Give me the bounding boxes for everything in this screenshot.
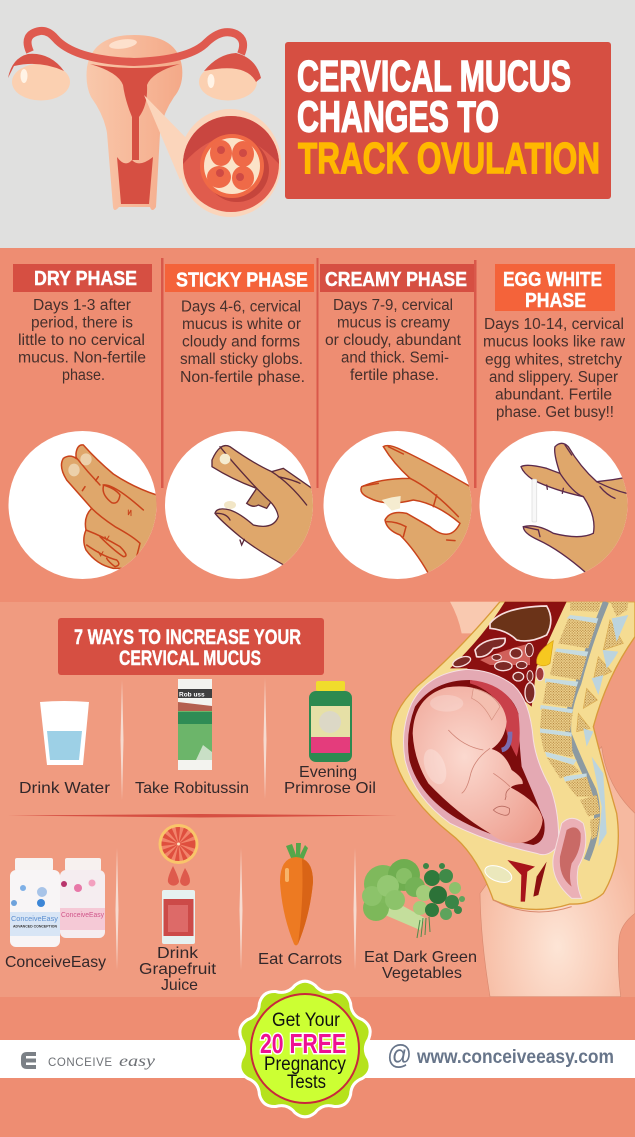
item: conceiveeasy bottles: ConceiveEasy xyxy=(61,912,104,919)
phase: creamy xyxy=(320,264,474,579)
phase: egg white: Days 10-14, cervical xyxy=(484,316,624,333)
heading: 7 ways xyxy=(58,618,324,675)
sub-element: uterus xyxy=(403,669,559,855)
item: eat carrots: Eat Carrots xyxy=(258,951,342,968)
phase: creamy: Days 7-9, cervical xyxy=(333,297,453,314)
item: drink water: Drink Water xyxy=(19,780,111,797)
item: drink grapefruit juice: Grapefruit xyxy=(139,961,217,978)
phase: egg white: PHASE xyxy=(525,290,586,312)
item: conceiveeasy bottles: ADVANCED CONCEPTION xyxy=(13,924,57,928)
icon: egg white fingers xyxy=(521,443,630,573)
sub-element: spine xyxy=(540,602,628,860)
phase: egg white: and slippery. Super xyxy=(489,369,618,386)
panel: cervical mucus phases xyxy=(8,258,628,579)
phase: sticky: mucus is white or xyxy=(182,316,301,333)
badge: 20 free pregnancy tests xyxy=(240,981,370,1117)
phase: dry: little to no cervical xyxy=(18,332,145,349)
item: evening primrose oil: Primrose Oil xyxy=(284,780,376,797)
illustration: pregnancy anatomy cross-section xyxy=(391,602,635,997)
phase: egg white: egg whites, stretchy xyxy=(485,351,622,368)
title xyxy=(285,42,611,199)
logo: conceive easy: easy xyxy=(119,1053,156,1070)
phase: sticky: Non-fertile phase. xyxy=(180,369,305,386)
phase: sticky: cloudy and forms xyxy=(182,334,300,351)
phase: egg white: mucus looks like raw xyxy=(483,334,626,351)
heading: 7 ways: 7 WAYS TO INCREASE YOUR xyxy=(74,625,301,649)
item: take robitussin: Rob uss xyxy=(179,692,205,698)
badge: 20 free pregnancy tests: 20 FREE xyxy=(260,1028,346,1059)
item: eat carrots xyxy=(258,843,342,968)
item: conceiveeasy bottles xyxy=(5,858,106,971)
sub-element: pelvic organs xyxy=(483,818,586,912)
item: drink water xyxy=(19,701,111,797)
item: take robitussin: Take Robitussin xyxy=(135,780,249,797)
phase: dry: DRY PHASE xyxy=(34,268,137,290)
item: evening primrose oil: Evening xyxy=(299,764,357,781)
phase: creamy: mucus is creamy xyxy=(337,314,450,332)
item: eat dark green vegetables: Eat Dark Green xyxy=(364,949,477,966)
phase: creamy: or cloudy, abundant xyxy=(325,332,462,349)
item: conceiveeasy bottles: ConceiveEasy xyxy=(5,954,106,971)
website address: www.conceiveeasy.com xyxy=(416,1047,614,1068)
item: drink grapefruit juice: Juice xyxy=(161,977,198,994)
phase: dry xyxy=(8,264,160,579)
website address xyxy=(387,1039,614,1070)
phase: egg white xyxy=(480,264,630,579)
panel: 7 ways section xyxy=(0,602,635,997)
item: conceiveeasy bottles: ConceiveEasy xyxy=(11,914,58,923)
panel: footer xyxy=(0,981,635,1137)
phase: creamy: and thick. Semi- xyxy=(341,350,449,367)
phase: sticky: Days 4-6, cervical xyxy=(181,298,301,315)
heading: 7 ways: CERVICAL MUCUS xyxy=(119,646,261,670)
phase: dry: Days 1-3 after xyxy=(33,297,131,314)
icon: sticky fingers xyxy=(212,446,317,567)
phase: dry: mucus. Non-fertile xyxy=(18,350,146,367)
phase: creamy: fertile phase. xyxy=(350,367,439,384)
website address: @ xyxy=(387,1039,412,1070)
phase: creamy: CREAMY PHASE xyxy=(325,269,467,291)
title: CHANGES TO xyxy=(297,92,499,142)
logo: conceive easy: CONCEIVE xyxy=(48,1057,112,1069)
item: drink grapefruit juice xyxy=(139,824,217,994)
badge: 20 free pregnancy tests: Pregnancy xyxy=(264,1054,346,1075)
illustration: uterus and cervix xyxy=(8,31,281,217)
phase: sticky: STICKY PHASE xyxy=(176,270,308,292)
logo: conceive easy xyxy=(21,1052,156,1070)
phase: sticky: small sticky globs. xyxy=(180,351,303,368)
item: eat dark green vegetables: Vegetables xyxy=(382,965,462,982)
item: drink grapefruit juice: Drink xyxy=(157,945,199,962)
panel: header xyxy=(0,0,635,248)
item: take robitussin xyxy=(135,679,249,797)
icon: dry fingers xyxy=(61,445,160,568)
badge: 20 free pregnancy tests: Tests xyxy=(287,1072,326,1093)
icon: creamy fingers xyxy=(361,446,473,573)
badge: 20 free pregnancy tests: Get Your xyxy=(272,1010,341,1031)
phase: dry: phase. xyxy=(62,367,105,384)
item: evening primrose oil xyxy=(284,681,376,797)
sub-element: fetus xyxy=(413,686,543,843)
phase: dry: period, there is xyxy=(31,314,133,332)
phase: egg white: abundant. Fertile xyxy=(495,386,612,403)
item: eat dark green vegetables xyxy=(362,859,477,982)
phase: egg white: phase. Get busy!! xyxy=(496,404,614,421)
phase: egg white: EGG WHITE xyxy=(503,269,602,291)
phase: sticky xyxy=(165,264,317,579)
